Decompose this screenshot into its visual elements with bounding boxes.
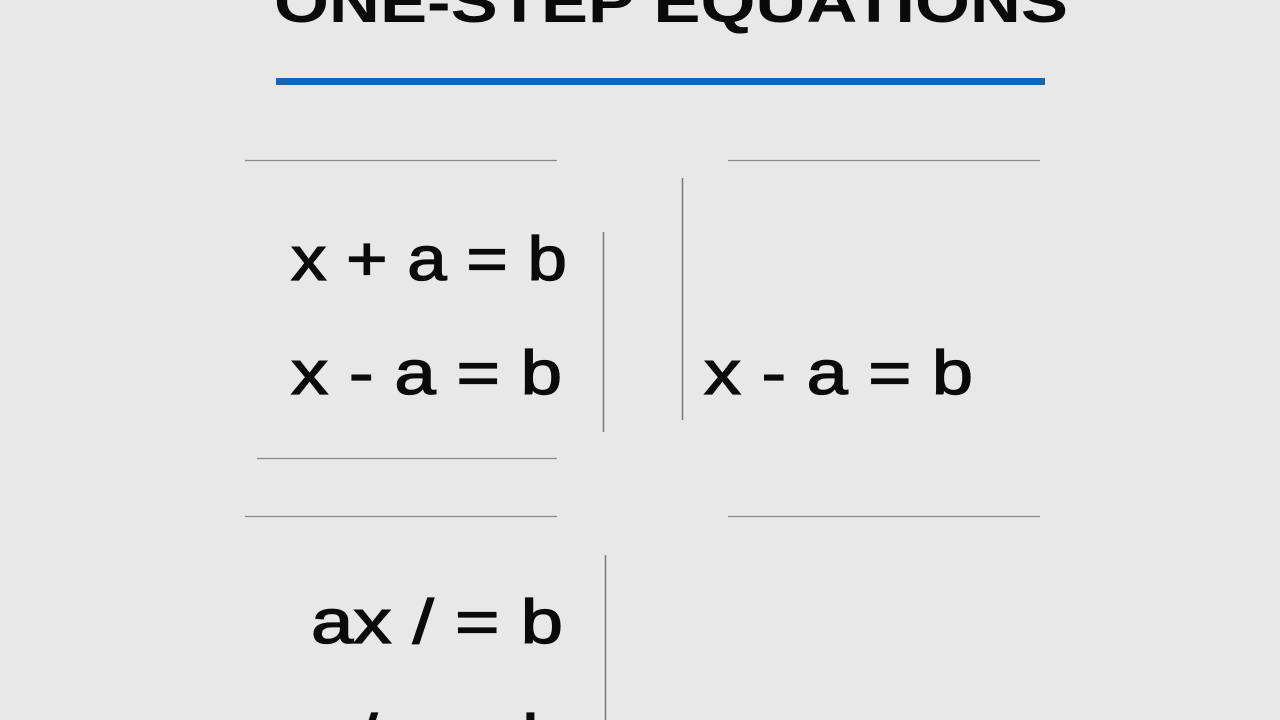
panel: multiplication/division equations bbox=[300, 588, 563, 720]
panel: subtraction equation: x - a = b bbox=[704, 339, 973, 408]
title underline bbox=[276, 78, 1045, 85]
equation: x - a = b: x - a = b bbox=[291, 339, 562, 408]
equation: ax / = b: ax / = b bbox=[311, 588, 563, 657]
equation: x + a = b: x + a = b bbox=[291, 225, 567, 294]
panel: addition/subtraction equations bbox=[291, 225, 567, 408]
